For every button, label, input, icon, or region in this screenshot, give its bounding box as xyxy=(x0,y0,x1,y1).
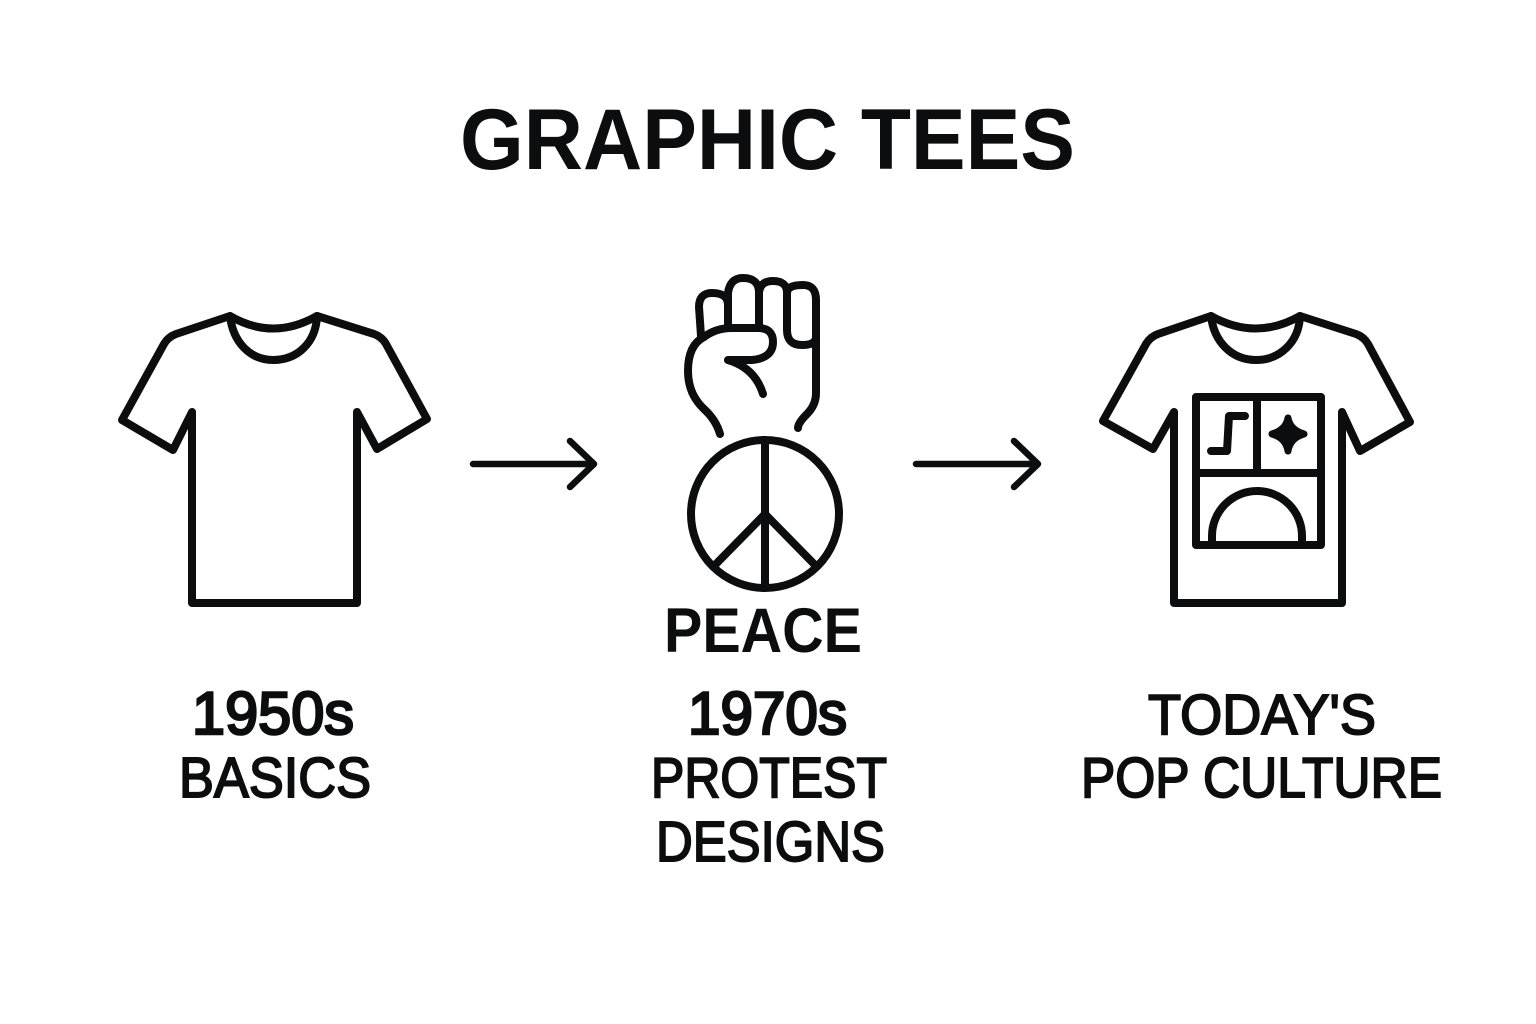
caption: 1970s protest designs: PROTEST xyxy=(651,746,887,810)
caption: today's pop culture: POP CULTURE xyxy=(1081,746,1442,810)
arrow: 1950s to 1970s xyxy=(473,441,594,487)
icon: raised fist xyxy=(688,278,816,434)
caption: 1970s protest designs: DESIGNS xyxy=(656,810,885,874)
title: GRAPHIC TEES xyxy=(460,92,1075,188)
arrow: 1970s to today xyxy=(916,441,1038,487)
caption: today's pop culture: TODAY'S xyxy=(1148,683,1376,747)
icon: plain t-shirt xyxy=(122,316,427,603)
peace label: PEACE xyxy=(664,596,862,666)
caption: 1950s basics: BASICS xyxy=(179,746,371,810)
caption: 1970s protest designs xyxy=(651,680,887,874)
caption: 1950s basics: 1950s xyxy=(192,680,354,747)
shirt graphic panel xyxy=(1196,397,1321,545)
caption: today's pop culture xyxy=(1081,683,1442,810)
caption: 1970s protest designs: 1970s xyxy=(688,680,847,747)
caption: 1950s basics xyxy=(179,680,371,810)
icon: peace symbol xyxy=(691,440,839,588)
icon: graphic t-shirt xyxy=(1103,316,1410,603)
